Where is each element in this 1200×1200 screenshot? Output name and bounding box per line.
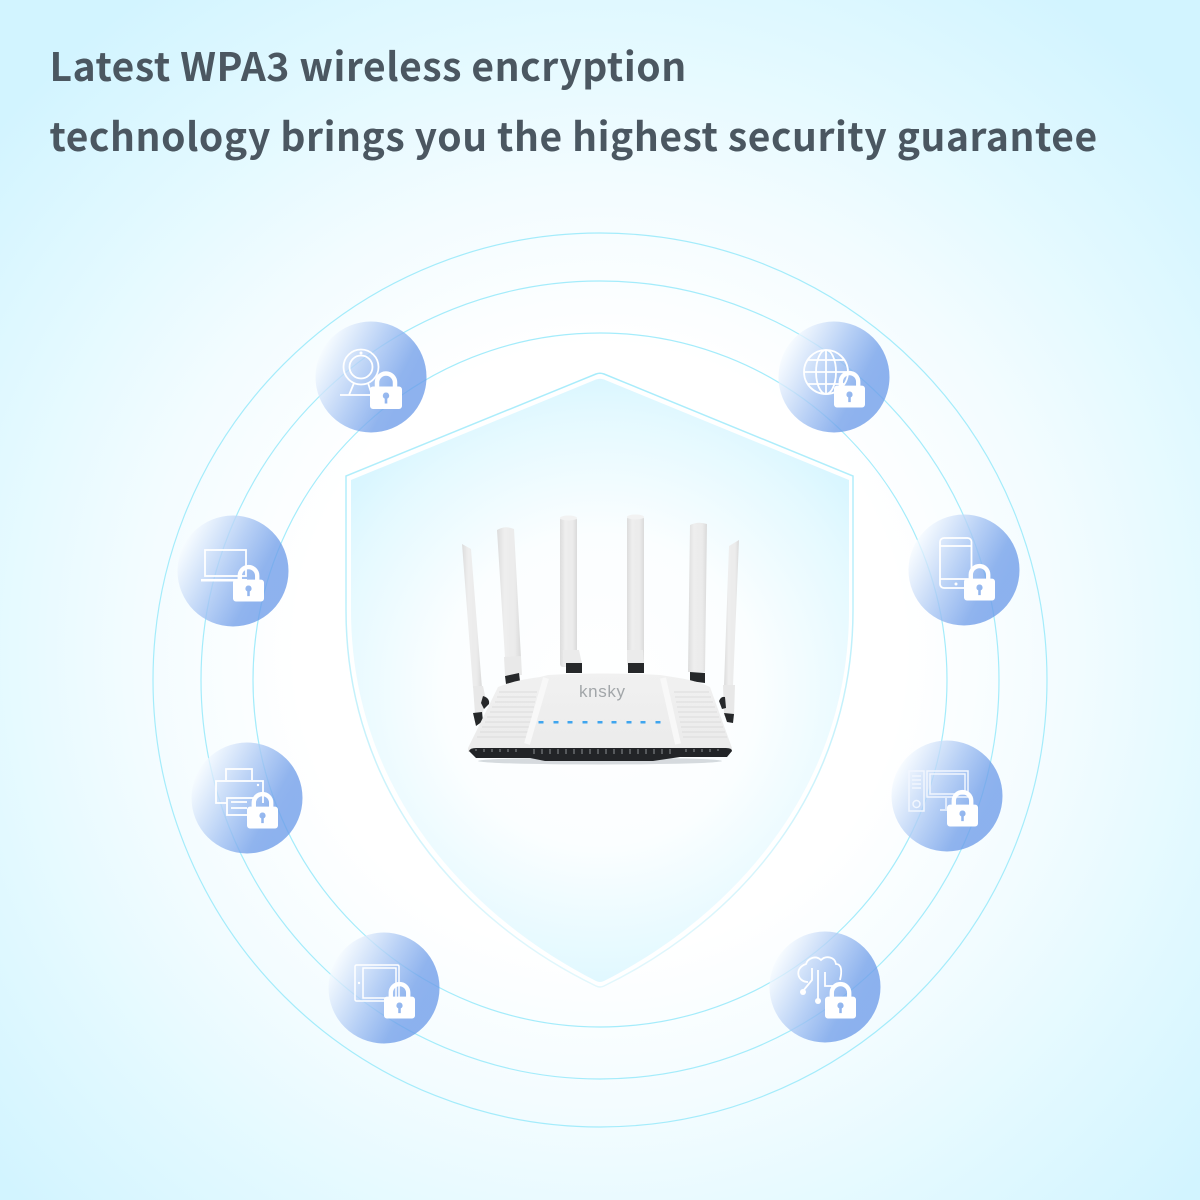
antenna 5 bbox=[688, 523, 707, 683]
router base bbox=[469, 748, 732, 761]
antenna 1 bbox=[462, 544, 489, 726]
router LEDs bbox=[538, 721, 660, 724]
bubble: laptop bbox=[178, 516, 288, 626]
antenna 6 bbox=[719, 540, 739, 723]
title: Latest WPA3 wireless encryption bbox=[50, 37, 687, 93]
bubble: webcam bbox=[316, 322, 426, 432]
antenna 3 bbox=[560, 516, 582, 673]
title bbox=[50, 37, 1098, 163]
concentric rings bbox=[153, 233, 1047, 1127]
shield bbox=[346, 373, 853, 987]
title: technology brings you the highest security guarantee bbox=[50, 107, 1098, 163]
bubble: cloud bbox=[770, 932, 880, 1042]
bubble: desktop bbox=[892, 740, 1002, 852]
bubble: phone bbox=[908, 514, 1020, 626]
router logo: knsky bbox=[579, 682, 626, 701]
bubble: tablet bbox=[328, 932, 440, 1044]
router bbox=[462, 514, 739, 764]
router centre panel edges bbox=[527, 678, 678, 744]
antenna 2 bbox=[497, 527, 522, 684]
router body bbox=[468, 674, 732, 752]
antenna 4 bbox=[627, 514, 644, 673]
bubble: globe bbox=[778, 322, 890, 432]
router side vents bbox=[477, 692, 727, 737]
bubble: printer bbox=[192, 742, 302, 854]
